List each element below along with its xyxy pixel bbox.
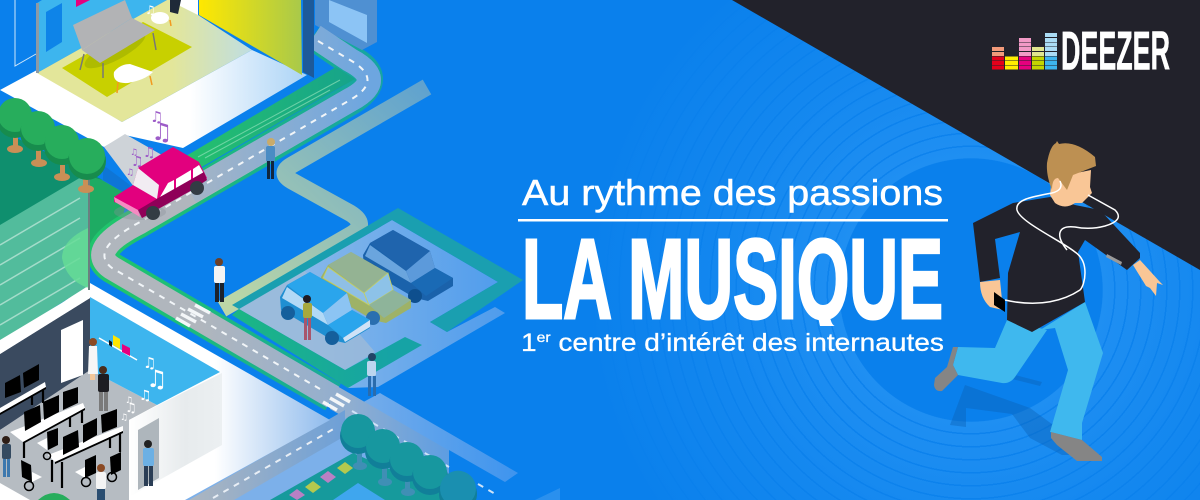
- dark corner panel: [732, 0, 1200, 270]
- far road dashes: [352, 411, 497, 495]
- green trees: [0, 98, 106, 193]
- hair: [1047, 141, 1096, 190]
- person: man in black: [98, 366, 109, 411]
- front wall: [129, 373, 222, 497]
- dark blue car: [363, 230, 453, 303]
- white notes: ♫: [125, 401, 137, 416]
- light green blob: [62, 228, 88, 288]
- back leg: [953, 320, 1047, 383]
- purple notes: ♫: [143, 145, 156, 161]
- building window: [329, 0, 367, 43]
- front shoe: [1051, 432, 1102, 461]
- upper building white floor: [0, 50, 307, 148]
- white room section: [180, 0, 198, 15]
- person: man in white tee: [214, 258, 225, 302]
- torso and arms: [973, 197, 1140, 332]
- road extension: [330, 382, 449, 477]
- purple notes: [126, 108, 173, 178]
- lower building floor: [0, 283, 330, 500]
- people: [2, 138, 376, 500]
- pink car: [114, 147, 207, 220]
- person in upper room: [170, 0, 181, 14]
- corner accent: [535, 488, 560, 500]
- strip lines: [198, 80, 340, 158]
- person: woman on sidewalk: [367, 353, 376, 396]
- blue gap: [103, 165, 130, 195]
- divider: [518, 219, 948, 222]
- sofa: [73, 0, 156, 78]
- purple notes: ♫: [131, 154, 144, 170]
- olive car: [321, 252, 411, 325]
- garden: [270, 453, 460, 500]
- purple notes: ♫: [126, 168, 134, 178]
- person: blue woman on road: [266, 138, 275, 179]
- front leg: [1040, 302, 1103, 440]
- white notes: ♫: [146, 365, 168, 393]
- rug: [62, 22, 192, 97]
- shadow: [950, 375, 1090, 455]
- sleeve label: [1106, 254, 1122, 265]
- upper road: [103, 36, 369, 397]
- person: woman left: [2, 436, 11, 477]
- white notes: ♫: [125, 396, 133, 406]
- blue wall: [90, 297, 220, 405]
- white note top: ♫: [145, 3, 156, 17]
- white notes: ♫: [120, 413, 128, 423]
- white floor corner: [0, 483, 30, 500]
- navy wall: [0, 298, 90, 430]
- phone: [994, 292, 1005, 312]
- desks and monitors: [0, 364, 123, 490]
- shelf with boxes: [99, 335, 137, 360]
- heading: au rythme: Au rythme des passions: [522, 172, 943, 213]
- picture: [76, 0, 90, 7]
- purple notes: ♫: [151, 118, 173, 146]
- running man: [934, 141, 1163, 461]
- subheading: centre d’intérêt des internautes: [551, 329, 944, 357]
- lawn stripes: [0, 198, 80, 325]
- grey patch: [104, 134, 183, 195]
- parking platform: [232, 208, 523, 388]
- floor: [37, 0, 252, 122]
- doorway: [138, 418, 159, 490]
- lawn post: [88, 172, 90, 290]
- yellow wall: [199, 0, 302, 75]
- left garden: [0, 130, 103, 228]
- upper road border: [103, 35, 368, 397]
- isometric city: [0, 0, 560, 500]
- lower road dashes: [213, 427, 337, 498]
- headline block: [518, 172, 948, 357]
- purple notes: ♫: [130, 148, 138, 158]
- earphone cable: [1005, 181, 1118, 303]
- subheading: er: [537, 329, 551, 345]
- lower-right pavement: [180, 393, 518, 500]
- subheading: 1: [521, 329, 535, 357]
- flowers: [289, 462, 353, 500]
- right hand: [1133, 260, 1163, 296]
- pool: [333, 483, 385, 500]
- crosswalk: [176, 305, 350, 410]
- blue wall top room: [37, 0, 167, 73]
- window outline: [15, 0, 36, 66]
- face: [1050, 170, 1092, 206]
- road dashes: [104, 41, 368, 389]
- white door: [61, 320, 83, 383]
- white notes: ♫: [139, 388, 152, 404]
- white notes: ♫: [143, 354, 156, 372]
- wall top: [0, 286, 90, 354]
- back shoe: [934, 347, 958, 391]
- coffee table: [114, 64, 153, 93]
- teal trees: [340, 414, 477, 500]
- green strip: [186, 67, 355, 168]
- person: woman in white dress: [88, 338, 98, 380]
- lower road: [189, 410, 345, 500]
- person: woman near car: [303, 295, 312, 340]
- person: woman bottom: [96, 464, 106, 500]
- white notes: [120, 354, 168, 423]
- trail path: [222, 87, 427, 309]
- left hand: [980, 280, 1003, 310]
- purple notes: ♫: [150, 108, 163, 126]
- green bush: [38, 493, 70, 500]
- garden right side: [88, 172, 128, 262]
- wall panel: [46, 3, 62, 52]
- person: man in doorway: [143, 440, 154, 486]
- deezer logo: [992, 20, 1170, 82]
- upper building: [315, 0, 377, 50]
- striped lawn: [0, 173, 88, 342]
- grey room floor: [0, 370, 157, 500]
- wall edge: [36, 3, 39, 73]
- navy column: [303, 0, 314, 78]
- equalizer icon: [992, 33, 1057, 70]
- small table: [151, 12, 171, 26]
- blue car: [280, 272, 370, 345]
